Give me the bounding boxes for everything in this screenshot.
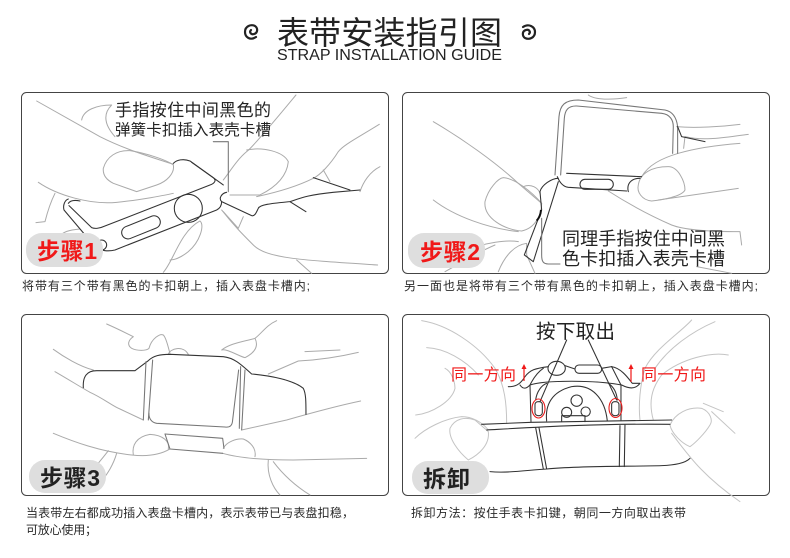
panel frame <box>402 314 770 496</box>
caption: removal: 拆卸方法：按住手表卡扣键，朝同一方向取出表带 <box>411 505 686 520</box>
panel: step 1 <box>22 92 388 274</box>
callout text: 同理手指按住中间黑 <box>562 229 725 249</box>
step badge: 步骤2 <box>420 239 480 265</box>
caption: step 2: 另一面也是将带有三个带有黑色的卡扣朝上，插入表盘卡槽内; <box>404 278 758 293</box>
step badge <box>29 460 106 493</box>
callout text: 弹簧卡扣插入表壳卡槽 <box>115 121 271 139</box>
illustration: strap fully installed <box>53 321 367 495</box>
right red direction label: 同一方向 <box>641 366 706 384</box>
icon: left swirl <box>245 25 257 39</box>
callout text <box>562 229 725 269</box>
caption: step 3: 当表带左右都成功插入表盘卡槽内，表示表带已与表盘扣稳， <box>26 505 354 520</box>
removal badge <box>412 461 489 494</box>
callout text: 手指按住中间黑色的 <box>115 101 271 120</box>
step badge <box>26 233 103 267</box>
header <box>245 15 535 64</box>
panel frame <box>402 92 770 274</box>
subtitle: STRAP INSTALLATION GUIDE <box>277 47 502 64</box>
panel frame <box>22 314 388 496</box>
illustration: watch held in fingers <box>36 95 380 273</box>
icon: right swirl <box>523 25 535 39</box>
step badge <box>408 233 485 268</box>
panel: step 2 <box>402 92 770 274</box>
right red highlight ring <box>609 398 622 418</box>
panel: step 3 <box>22 314 388 496</box>
step badge: 步骤3 <box>40 465 100 491</box>
callout text: 色卡扣插入表壳卡槽 <box>562 249 725 269</box>
panel: removal <box>402 314 770 502</box>
caption: step 1: 将带有三个带有黑色的卡扣朝上，插入表盘卡槽内; <box>22 278 310 293</box>
caption: step 3: 可放心使用； <box>26 522 97 537</box>
illustration: second side of watch <box>433 95 748 273</box>
step badge: 步骤1 <box>37 238 97 264</box>
callout text <box>115 101 271 139</box>
callout text: press and remove: 按下取出 <box>536 321 615 343</box>
caption: step 3 <box>26 505 354 537</box>
left red direction label: 同一方向 <box>451 366 516 384</box>
panel frame <box>22 92 388 274</box>
illustration: removing the strap <box>415 320 740 502</box>
title: 表带安装指引图 <box>277 15 502 51</box>
left red highlight ring <box>532 399 545 418</box>
removal badge: 拆卸 <box>423 466 470 492</box>
